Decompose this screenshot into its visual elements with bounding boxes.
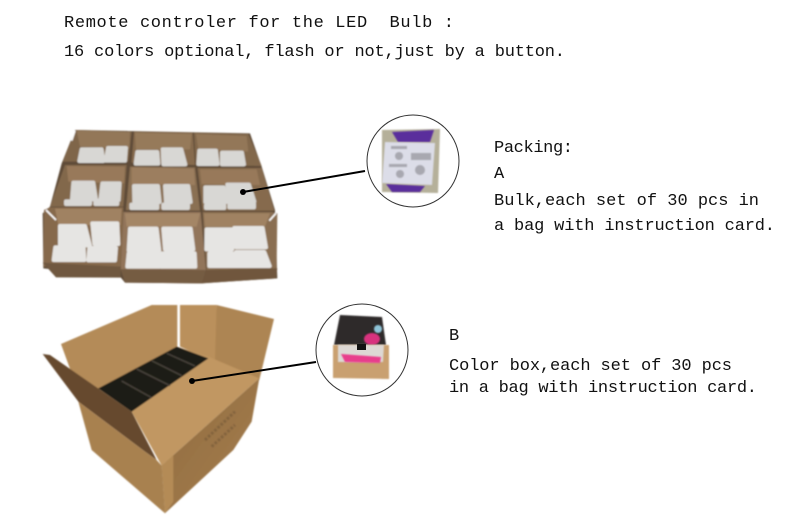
title text: 16 colors optional, flash or not,just by a button. — [64, 43, 565, 62]
text block: packing A: A — [494, 165, 505, 184]
text block: packing A — [494, 139, 775, 236]
row 3 boxes — [43, 207, 277, 283]
leader line A — [240, 171, 365, 195]
photo: bulk cartons grid — [43, 130, 277, 283]
text block: packing A: Packing: — [494, 139, 573, 158]
text block: packing B: B — [449, 327, 459, 346]
text block: packing B — [449, 327, 757, 398]
text block: packing A: Bulk,each set of 30 pcs in — [494, 192, 759, 211]
carton top panel — [98, 347, 259, 466]
text block: packing B: Color box,each set of 30 pcs — [449, 357, 732, 376]
callout circle A: bag with instruction card — [367, 115, 459, 207]
row 2 boxes — [50, 165, 274, 211]
row 1 boxes — [63, 130, 262, 166]
carton corner slits — [46, 131, 276, 221]
title text: Remote controler for the LED Bulb : — [64, 14, 454, 33]
callout circle B: color box — [316, 304, 408, 396]
back flaps — [61, 305, 274, 390]
text block: packing B: in a bag with instruction card. — [449, 379, 757, 398]
leader line B — [189, 362, 316, 384]
black color boxes — [98, 347, 208, 412]
white packs — [66, 148, 254, 208]
text block: packing A: a bag with instruction card. — [494, 217, 775, 236]
title text — [64, 14, 565, 62]
carton sides — [78, 402, 165, 513]
left flap — [43, 354, 157, 460]
photo: open carton with color boxes — [43, 305, 274, 513]
